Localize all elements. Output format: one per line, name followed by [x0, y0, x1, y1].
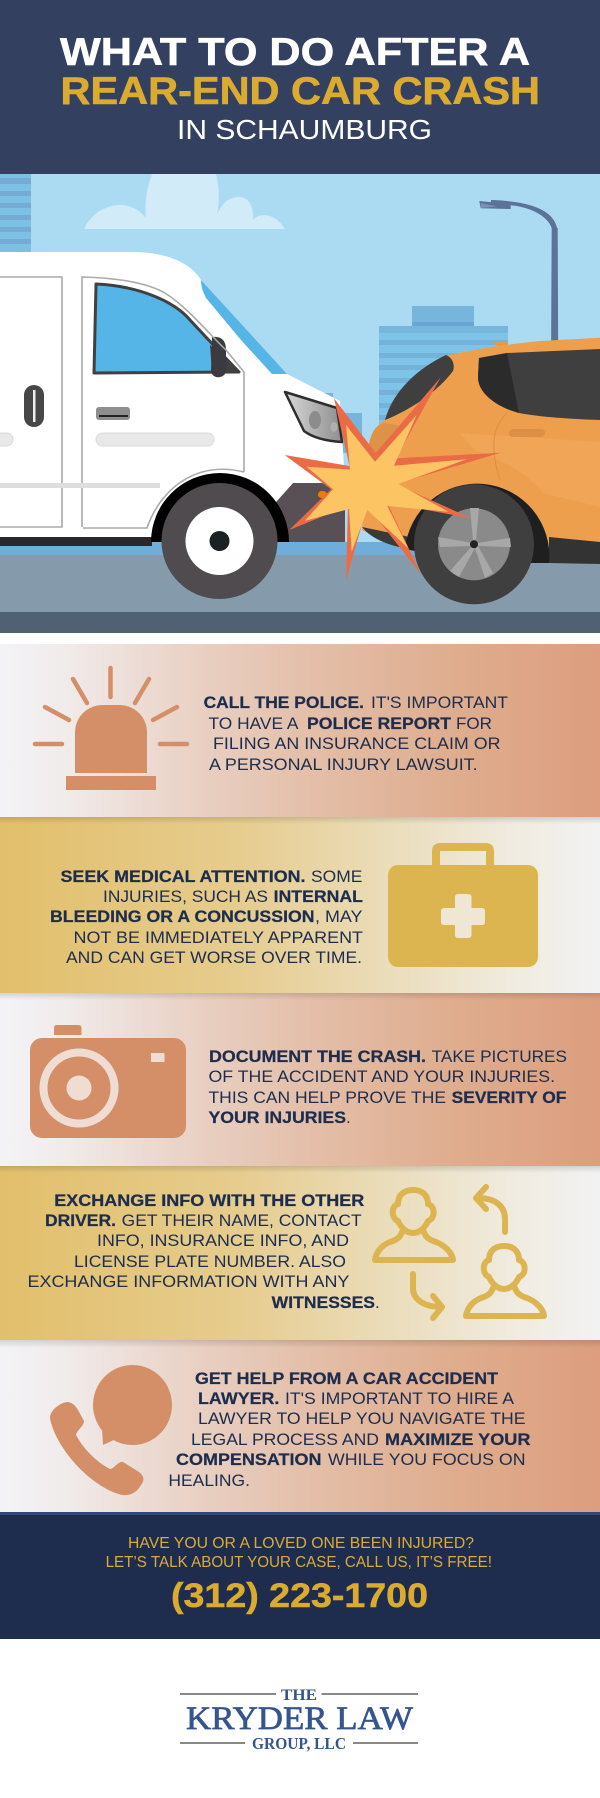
- text: document the crash: TAKE PICTURES: [432, 1047, 567, 1066]
- text: exchange info: GET THEIR NAME, CONTACT: [122, 1211, 362, 1230]
- text: get help from a lawyer: [168, 1369, 530, 1490]
- text: seek medical attention: SEEK MEDICAL ATTENTION.: [60, 867, 306, 886]
- text: exchange info: DRIVER.: [45, 1211, 116, 1230]
- icon: camera: [30, 1025, 186, 1138]
- text: exchange info: .: [375, 1293, 380, 1312]
- text: get help from a lawyer: WHILE YOU FOCUS ON: [328, 1450, 526, 1469]
- panel: get help from a lawyer: [0, 1340, 600, 1512]
- text: get help from a lawyer: COMPENSATION: [176, 1450, 322, 1469]
- header band: [0, 0, 600, 174]
- text: document the crash: OF THE ACCIDENT AND YOUR INJURIES.: [208, 1067, 555, 1086]
- text: exchange info: WITNESSES: [272, 1293, 375, 1312]
- call to action text: [106, 1535, 492, 1571]
- text: get help from a lawyer: IT'S IMPORTANT TO HIRE A: [285, 1389, 515, 1408]
- van front wheel: [162, 483, 278, 599]
- crash starburst: [285, 377, 501, 580]
- text: exchange info: [28, 1191, 380, 1312]
- arrow up-left: [476, 1187, 505, 1232]
- text: exchange info: EXCHANGE INFORMATION WITH ANY: [28, 1272, 349, 1291]
- person one: [375, 1190, 453, 1260]
- person two: [466, 1246, 544, 1316]
- text: document the crash: DOCUMENT THE CRASH.: [209, 1047, 426, 1066]
- text: get help from a lawyer: HEALING.: [168, 1471, 250, 1490]
- text: seek medical attention: SOME: [311, 867, 362, 886]
- icon: police siren: [35, 668, 187, 790]
- text: seek medical attention: INJURIES, SUCH AS: [103, 887, 268, 906]
- call to action band: [0, 1512, 600, 1639]
- text: call the police: FOR: [456, 714, 492, 733]
- phone number: (312) 223-1700: [171, 1577, 428, 1615]
- title line 1: WHAT TO DO AFTER A: [60, 31, 530, 74]
- cloud: [84, 174, 285, 229]
- logo: the kryder law group: KRYDER LAW: [186, 1701, 414, 1737]
- text: call the police: IT'S IMPORTANT: [371, 693, 508, 712]
- panel: call the police: [0, 644, 600, 817]
- text: document the crash: YOUR INJURIES: [208, 1108, 346, 1127]
- text: get help from a lawyer: LAWYER TO HELP YOU NAVIGATE THE: [198, 1409, 526, 1428]
- arrow down-right: [413, 1274, 442, 1318]
- text: seek medical attention: , MAY: [315, 907, 362, 926]
- text: document the crash: .: [346, 1108, 351, 1127]
- text: seek medical attention: NOT BE IMMEDIATELY APPARENT: [74, 928, 363, 947]
- icon: two people exchanging info: [375, 1187, 544, 1318]
- panel: seek medical attention: [0, 817, 600, 993]
- icon: phone with speech bubble: [50, 1365, 172, 1495]
- logo: the kryder law group: THE: [281, 1687, 317, 1704]
- orange car: [362, 338, 600, 604]
- title line 2: REAR-END CAR CRASH: [60, 70, 540, 113]
- road: [0, 542, 600, 633]
- text: get help from a lawyer: LEGAL PROCESS AND: [191, 1430, 379, 1449]
- logo: the kryder law group: [180, 1687, 418, 1753]
- text: exchange info: INFO, INSURANCE INFO, AND: [97, 1231, 349, 1250]
- text: call the police: A PERSONAL INJURY LAWSUIT.: [209, 755, 478, 774]
- street lamp: [479, 200, 572, 580]
- panel: exchange info: [0, 1166, 600, 1340]
- logo: the kryder law group: GROUP, LLC: [252, 1734, 346, 1753]
- text: call the police: TO HAVE A: [208, 714, 299, 733]
- text: call the police: [204, 693, 508, 774]
- text: get help from a lawyer: MAXIMIZE YOUR: [385, 1430, 530, 1449]
- text: exchange info: EXCHANGE INFO WITH THE OTHER: [54, 1191, 364, 1210]
- panel: document the crash: [0, 993, 600, 1166]
- text: get help from a lawyer: LAWYER.: [198, 1389, 279, 1408]
- text: seek medical attention: [50, 867, 363, 967]
- text: seek medical attention: INTERNAL: [274, 887, 363, 906]
- text: get help from a lawyer: GET HELP FROM A CAR ACCIDENT: [195, 1369, 499, 1388]
- white van: [0, 252, 345, 599]
- text: call the police: POLICE REPORT: [307, 714, 452, 733]
- icon: first aid kit: [388, 847, 538, 967]
- left building: [0, 174, 31, 252]
- text: call the police: CALL THE POLICE.: [204, 693, 364, 712]
- text: exchange info: LICENSE PLATE NUMBER. ALSO: [74, 1252, 346, 1271]
- text: seek medical attention: AND CAN GET WORSE OVER TIME.: [66, 948, 362, 967]
- call to action text: HAVE YOU OR A LOVED ONE BEEN INJURED?: [128, 1535, 474, 1552]
- car wheel: [414, 484, 534, 604]
- text: document the crash: THIS CAN HELP PROVE THE: [208, 1088, 446, 1107]
- hero illustration: rear-end crash: [0, 174, 600, 633]
- call to action text: LET’S TALK ABOUT YOUR CASE, CALL US, IT’S FREE!: [106, 1554, 492, 1571]
- text: call the police: FILING AN INSURANCE CLAIM OR: [213, 734, 501, 753]
- text: document the crash: SEVERITY OF: [452, 1088, 566, 1107]
- text: document the crash: [208, 1047, 567, 1127]
- subtitle: IN SCHAUMBURG: [177, 114, 432, 145]
- centre building: [322, 306, 508, 453]
- text: seek medical attention: BLEEDING OR A CONCUSSION: [50, 907, 315, 926]
